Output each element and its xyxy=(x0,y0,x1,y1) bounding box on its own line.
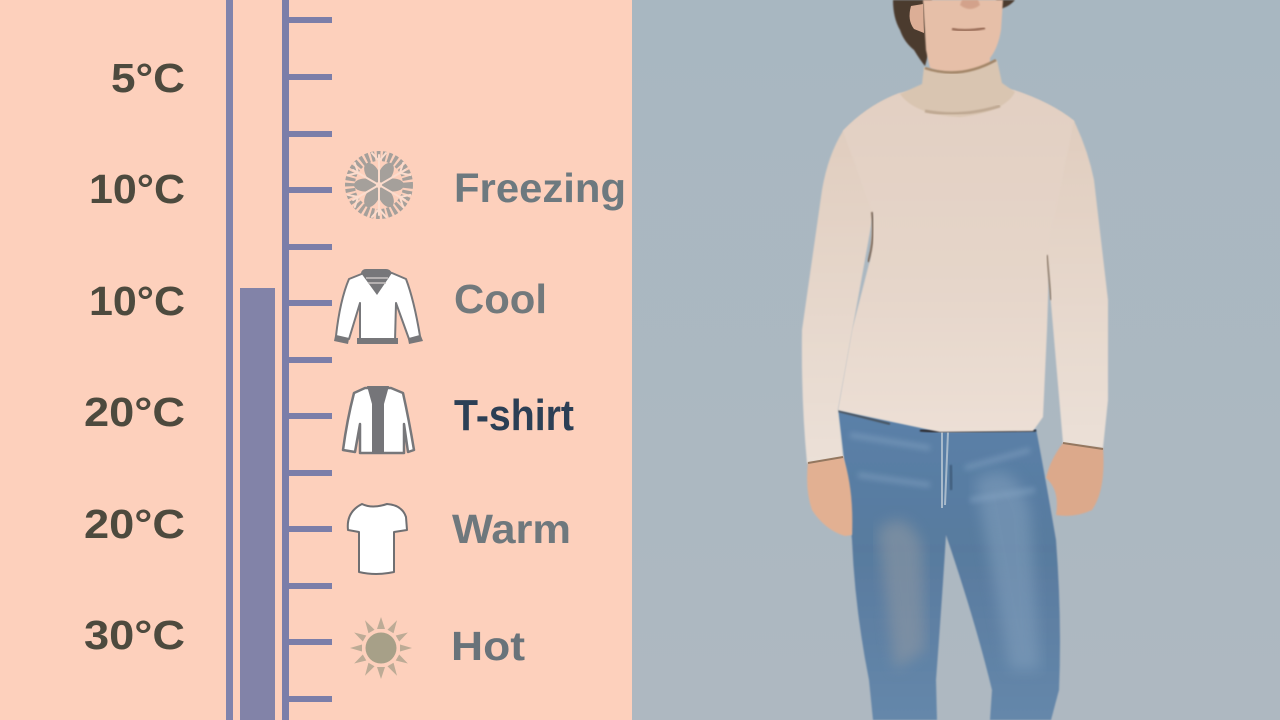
label: 20°C: 20°C xyxy=(84,389,185,435)
label: 10°C second: 10°C xyxy=(89,278,185,324)
sweater sleeves xyxy=(802,93,900,463)
sweater body xyxy=(838,86,1074,432)
label: 10°C: 10°C xyxy=(89,166,185,212)
thermometer xyxy=(226,0,332,720)
face and neck xyxy=(923,0,1003,75)
panel: temperature scale background xyxy=(0,0,632,720)
label: T-shirt: T-shirt xyxy=(454,391,574,440)
tick marks xyxy=(288,17,332,702)
icon: sweater xyxy=(334,269,423,344)
label: 5°C: 5°C xyxy=(111,55,185,101)
hair xyxy=(893,0,1015,66)
label: 20°C second: 20°C xyxy=(84,501,185,547)
label: Freezing: Freezing xyxy=(454,165,626,211)
label: Cool: Cool xyxy=(454,276,547,322)
label: Hot: Hot xyxy=(451,623,525,669)
label: 30°C: 30°C xyxy=(84,612,185,658)
hands xyxy=(807,456,852,536)
icon: t-shirt xyxy=(348,504,407,574)
turtleneck collar xyxy=(900,60,1015,117)
icon: jacket xyxy=(343,386,414,454)
icon: snowflake xyxy=(348,153,410,217)
photo: man in sweater and jeans xyxy=(802,0,1108,720)
icon: sun xyxy=(350,617,412,679)
temperature labels xyxy=(84,55,185,658)
label: Warm: Warm xyxy=(452,506,571,552)
thermometer fill level xyxy=(240,288,275,720)
panel: photo background xyxy=(632,0,1280,720)
jeans xyxy=(838,411,1060,720)
